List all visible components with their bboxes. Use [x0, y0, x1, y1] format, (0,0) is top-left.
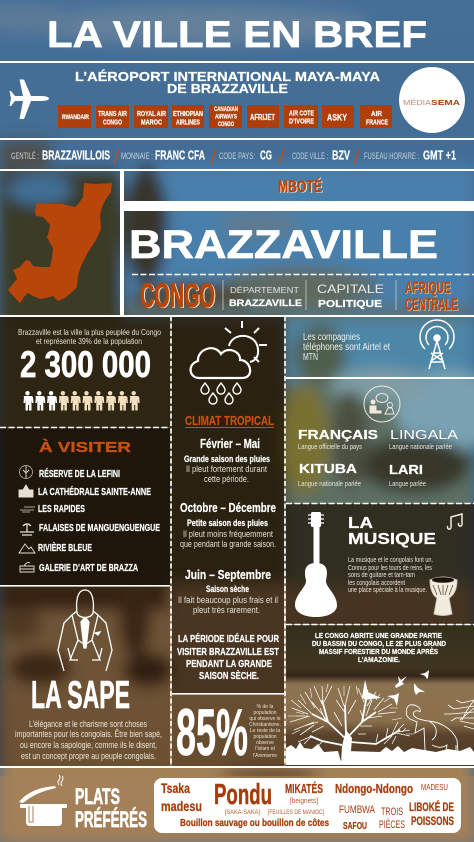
languages: KITUBA [299, 461, 358, 476]
season: octobre-decembre: Octobre – Décembre [180, 500, 276, 515]
info strip: CODE PAYS: [219, 151, 255, 161]
heading: la musique [348, 515, 436, 548]
telecom text: MTN [303, 352, 318, 363]
panel: dishes: Pondu [214, 779, 272, 811]
icon: suit [58, 590, 112, 671]
airline tags: AFRIJET [250, 112, 276, 122]
sape text: L’élégance et le charisme sont choses [29, 719, 147, 730]
panel: dishes: Bouillon sauvage ou bouillon de côtes [180, 817, 329, 829]
airline tags: AIR [371, 109, 382, 118]
panel: dishes: [beignets] [290, 798, 318, 805]
panel: dishes: Ndongo-Ndongo [335, 781, 413, 796]
season: octobre-decembre: que pendant la grande saison. [180, 539, 276, 549]
heading: la musique: MUSIQUE [348, 531, 436, 548]
season: octobre-decembre [180, 500, 276, 549]
country: CONGO [141, 278, 216, 316]
airline tags: D’IVOIRE [289, 116, 314, 126]
icon: cloud and sun [191, 321, 267, 404]
music text: les congolais accordent [348, 578, 406, 587]
greeting: MBOTÉ [279, 178, 323, 196]
airline tags: CANADIAN [214, 107, 238, 113]
season: octobre-decembre: Il pleut moins fréquemment [183, 529, 273, 539]
best period note: LA PÉRIODE IDÉALE POUR [178, 632, 279, 645]
country: CONGO [140, 277, 215, 315]
info strip: CODE VILLE : [292, 151, 328, 161]
season: octobre-decembre: Petite saison des pluies [187, 518, 268, 528]
airline tags: ASKY [327, 112, 347, 122]
season: fevrier-mai: Février – Mai [200, 436, 260, 451]
info strip: GMT +1 [423, 148, 456, 162]
panel: dishes: SAFOU [343, 821, 367, 832]
sape text: ou encore la sapologie, comme ils le disent, [20, 740, 157, 751]
info strip: MONNAIE : [121, 151, 153, 161]
city name: BRAZZAVILLE [129, 223, 438, 267]
languages: Langue parlée [389, 481, 426, 488]
panel overlays [0, 316, 474, 842]
airport heading: DE BRAZZAVILLE [167, 81, 288, 96]
list: places to visit: RIVIÈRE BLEUE [38, 541, 92, 554]
info strip: CG [260, 148, 272, 162]
stat caption: Le reste de la [250, 728, 280, 734]
best period note: VISITER BRAZZAVILLE EST [177, 646, 279, 658]
logo: media sema: MÉDIA [403, 98, 431, 107]
icon: antenna [420, 320, 454, 369]
music text: une place spéciale à la musique. [348, 585, 427, 594]
languages: Langue nationale parlée [389, 444, 452, 451]
airline tags: RWANDAIR [62, 114, 89, 121]
list: places to visit: FALAISES DE MANGUENGUENGUE [39, 523, 160, 534]
panel: dishes: [FEUILLES DE MANIOC] [268, 809, 324, 816]
airline tags: AIR COTE [289, 108, 314, 118]
logo: media sema: SEMA [431, 98, 461, 107]
stat caption: Christianisme. [249, 722, 281, 728]
facts strip [223, 280, 458, 314]
icon: drum [430, 577, 457, 616]
best period note: PENDANT LA GRANDE [186, 658, 272, 670]
panel: dishes: MADESU [421, 782, 448, 792]
list: places to visit [38, 467, 160, 574]
icon: guitar [295, 512, 337, 617]
greeting: MBOTÉ [278, 177, 322, 196]
panel: dishes: Tsaka [161, 780, 190, 796]
airline tags [58, 105, 392, 128]
music text: sons de guitare et tam-tam [348, 570, 415, 579]
panel: dishes: LIBOKÉ DE [409, 799, 454, 814]
panel: dishes: MIKATÉS [285, 781, 323, 796]
list: places to visit: GALERIE D’ART DE BRAZZA [39, 563, 138, 574]
airline tags: TRANS AIR [98, 109, 127, 118]
panel: dishes [154, 778, 461, 833]
panel: dishes: TROIS [381, 806, 403, 818]
panel: dishes: madesu [161, 798, 202, 814]
telecom text: téléphones sont Airtel et [303, 342, 390, 353]
airline tags: ROYAL AIR [137, 109, 166, 118]
music text: La musique et le congolais font un. [348, 555, 433, 564]
forest text [312, 633, 446, 664]
season: juin-septembre: pleut très rarement. [193, 605, 260, 615]
list: places to visit: LES RAPIDES [38, 504, 85, 515]
facts strip: POLITIQUE [318, 299, 382, 310]
airline tags: ETHIOPIAN [173, 109, 203, 118]
info strip: GENTILÉ : [11, 151, 39, 161]
icon: people talking [364, 386, 400, 422]
airline tags: AIRLINES [176, 118, 200, 126]
season: fevrier-mai: Grande saison des pluies [184, 454, 270, 464]
facts strip: DÉPARTEMENT [230, 285, 299, 295]
stat caption: population [253, 734, 277, 740]
icon: music notes [447, 514, 462, 529]
telecom text [303, 332, 390, 363]
heading: plats preferes: PLATS [75, 784, 120, 809]
heading: la sape: LA SAPE [31, 674, 130, 717]
heading: climat tropical: CLIMAT TROPICAL [185, 414, 274, 428]
info strip: FUSEAU HORAIRE : [364, 151, 419, 161]
panel: dishes: [SAKA-SAKA] [225, 809, 260, 816]
forest text: DU BASSIN DU CONGO, LE 2E PLUS GRAND [312, 641, 446, 648]
info strip: BRAZZAVILLOIS [42, 148, 110, 162]
forest text: L’AMAZONIE. [358, 657, 400, 664]
info strip [11, 148, 456, 164]
best period note [177, 632, 279, 682]
stat caption: qui observe le [249, 716, 281, 722]
season: juin-septembre: Saison sèche [206, 584, 249, 594]
info strip: BZV [332, 148, 350, 162]
icon: plane [10, 80, 49, 119]
stat: 85 percent: 85% [176, 695, 248, 769]
languages: Langue nationale parlée [298, 481, 361, 488]
music text [348, 555, 433, 594]
languages: Langue officielle du pays [298, 444, 362, 451]
icons: places [19, 466, 35, 572]
map: congo [8, 183, 112, 303]
title: LA VILLE EN BREF [47, 14, 427, 55]
languages [298, 427, 458, 488]
population text [18, 327, 161, 346]
population text: et représente 39% de la population [36, 336, 142, 346]
airline tags: CONGO [218, 122, 234, 128]
airline tags: FRANCE [366, 118, 388, 126]
airport heading: L’AÉROPORT INTERNATIONAL MAYA-MAYA [75, 69, 381, 84]
best period note: SAISON SÈCHE. [199, 669, 259, 682]
season: juin-septembre: Il fait beaucoup plus frais et il [178, 595, 278, 605]
facts strip: CAPITALE [317, 282, 384, 296]
heading: a visiter: À VISITER [39, 439, 131, 456]
heading: la musique: LA [348, 515, 373, 532]
stat caption: % de la [257, 704, 274, 710]
music text: Connus pour les tours de reins, les [348, 563, 432, 572]
airline tags: CONGO [103, 118, 122, 126]
sape text: est un concept propre au peuple congolais. [21, 751, 156, 762]
population number: 2 300 000 [20, 344, 151, 385]
stat caption: l’Islam et [255, 746, 275, 752]
languages: LARI [389, 462, 423, 477]
stat caption: l’Animisme [253, 753, 277, 759]
season: fevrier-mai: cette période. [204, 474, 249, 484]
country [140, 277, 216, 316]
icon: cooking pot [19, 775, 67, 826]
population text: Brazzaville est la ville la plus peuplée du Congo [18, 327, 161, 337]
airline tags: MAROC [141, 118, 162, 126]
illustration: forest [286, 670, 474, 765]
season: fevrier-mai [184, 436, 270, 484]
info strip: FRANC CFA [155, 148, 205, 162]
stat caption: observe [256, 740, 274, 746]
languages: LINGALA [390, 427, 458, 442]
icon: people row [24, 391, 140, 410]
stat caption: population [253, 710, 277, 716]
forest text: MASSIF FORESTIER DU MONDE APRÈS [319, 647, 438, 656]
season: juin-septembre [178, 567, 278, 615]
season: fevrier-mai: Il pleut fortement durant [186, 464, 267, 474]
list: places to visit: LA CATHÉDRALE SAINTE-ANNE [38, 485, 151, 498]
list: places to visit: RÉSERVE DE LA LEFINI [39, 467, 120, 480]
stat caption [249, 704, 281, 759]
facts strip: AFRIQUE [405, 280, 451, 297]
panel: dishes: PIÈCES [379, 818, 405, 831]
airport heading [75, 69, 381, 96]
logo: media sema [399, 67, 465, 133]
airline tags: AIRWAYS [215, 114, 237, 120]
facts strip: BRAZZAVILLE [229, 298, 302, 308]
heading: plats preferes: PRÉFÉRÉS [75, 807, 147, 832]
languages: FRANÇAIS [298, 427, 378, 442]
heading: plats preferes [75, 784, 147, 832]
panel: dishes: POISSONS [411, 814, 454, 828]
sape text [15, 719, 162, 762]
telecom text: Les compagnies [303, 332, 360, 343]
panel: dishes: FUMBWA [339, 804, 375, 816]
season: juin-septembre: Juin – Septembre [185, 567, 271, 582]
facts strip: AFRIQUE [406, 280, 452, 298]
sape text: importantes pour les congolais. Être bien sapé, [15, 729, 162, 740]
forest text: LE CONGO ABRITE UNE GRANDE PARTIE [315, 633, 442, 640]
